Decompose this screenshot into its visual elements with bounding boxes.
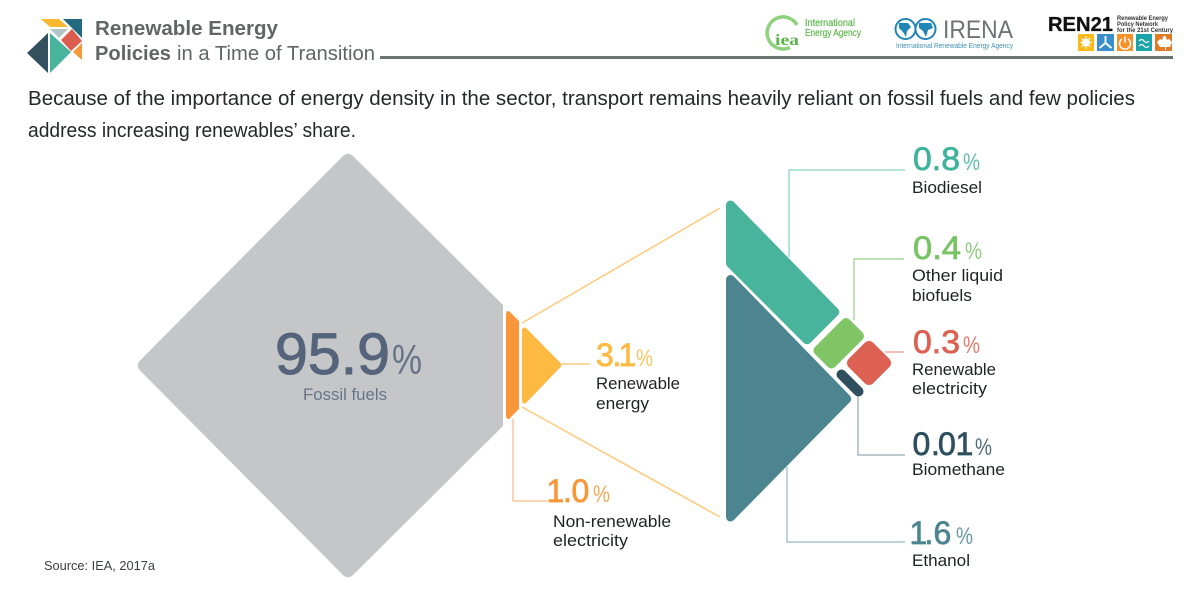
logo: IEA: International bbox=[805, 18, 855, 29]
label: 1.0% non-renewable electricity bbox=[546, 473, 671, 550]
header title bbox=[95, 18, 375, 65]
label: 1.0% non-renewable electricity: % bbox=[593, 481, 610, 508]
biodiesel shape bbox=[730, 205, 835, 340]
intro text: Because of the importance of energy density in the sector, transport remains heavily reliant on fossil fuels and few policies bbox=[28, 88, 1135, 110]
label: 0.3% renewable electricity: 0.3 bbox=[913, 324, 960, 360]
label: 0.01% biomethane bbox=[912, 426, 1005, 479]
source note: Source: IEA, 2017a bbox=[44, 559, 155, 573]
logo: IRENA bbox=[896, 16, 1013, 50]
logo: IRENA: IRENA bbox=[943, 16, 1013, 44]
fossil fuels diamond: 95.9 bbox=[275, 322, 390, 387]
label: 0.4% other liquid biofuels: Other liquid bbox=[912, 267, 1003, 285]
header title: in a Time of Transition bbox=[177, 43, 375, 65]
label: 0.3% renewable electricity: Renewable bbox=[912, 361, 996, 379]
label: 0.3% renewable electricity bbox=[912, 324, 996, 398]
fossil fuels diamond: Fossil fuels bbox=[303, 386, 387, 404]
label: 3.1% renewable energy: energy bbox=[596, 395, 650, 413]
connector lines bbox=[513, 170, 905, 542]
label: 1.0% non-renewable electricity: Non-renewable bbox=[553, 513, 671, 531]
fossil fuels diamond bbox=[138, 154, 503, 577]
header title: Renewable Energy bbox=[95, 18, 279, 40]
intro text: address increasing renewables’ share. bbox=[28, 120, 356, 142]
renewable energy triangle bbox=[524, 330, 559, 401]
non-renewable electricity bar bbox=[506, 311, 519, 419]
label: 3.1% renewable energy: 3.1 bbox=[596, 337, 636, 373]
fossil fuels diamond: % bbox=[392, 336, 422, 383]
ethanol triangle bbox=[730, 280, 847, 517]
label: 0.01% biomethane: Biomethane bbox=[912, 461, 1005, 479]
label: 0.8% biodiesel: Biodiesel bbox=[912, 179, 982, 197]
label: 0.4% other liquid biofuels: % bbox=[965, 238, 982, 265]
label: 1.6% ethanol bbox=[910, 515, 973, 570]
header logo: tangram bbox=[27, 19, 82, 73]
logo: IEA bbox=[767, 17, 861, 49]
logo: REN21: REN21 bbox=[1048, 14, 1113, 36]
logo: IEA: Energy Agency bbox=[805, 28, 861, 39]
label: 0.4% other liquid biofuels bbox=[912, 230, 1003, 305]
logo: REN21: Policy Network bbox=[1117, 22, 1159, 28]
other liquid biofuels shape bbox=[818, 323, 859, 364]
logo: REN21: Renewable Energy bbox=[1117, 16, 1169, 22]
logo: IEA: iea bbox=[775, 32, 799, 49]
label: 0.8% biodiesel bbox=[912, 141, 982, 197]
label: 0.01% biomethane: % bbox=[975, 434, 992, 461]
label: 1.6% ethanol: % bbox=[956, 523, 973, 550]
biomethane shape bbox=[842, 374, 858, 392]
label: 3.1% renewable energy: % bbox=[636, 345, 653, 372]
label: 0.4% other liquid biofuels: 0.4 bbox=[913, 230, 961, 266]
label: 0.3% renewable electricity: % bbox=[963, 332, 980, 359]
label: 1.0% non-renewable electricity: 1.0 bbox=[546, 473, 589, 509]
logo: REN21 bbox=[1048, 14, 1174, 51]
label: 0.3% renewable electricity: electricity bbox=[912, 380, 988, 398]
header title: Policies bbox=[95, 43, 171, 65]
label: 0.01% biomethane: 0.01 bbox=[912, 426, 973, 462]
label: 0.8% biodiesel: % bbox=[963, 149, 980, 176]
label: 1.0% non-renewable electricity: electricity bbox=[553, 532, 629, 550]
label: 3.1% renewable energy bbox=[596, 337, 680, 413]
label: 1.6% ethanol: 1.6 bbox=[910, 515, 951, 551]
renewable electricity shape bbox=[853, 347, 885, 379]
label: 3.1% renewable energy: Renewable bbox=[596, 375, 680, 393]
logo: IRENA: International Renewable Energy Agency bbox=[896, 41, 1013, 50]
label: 0.8% biodiesel: 0.8 bbox=[913, 141, 960, 177]
label: 1.6% ethanol: Ethanol bbox=[912, 552, 970, 570]
logo: REN21: for the 21st Century bbox=[1117, 28, 1174, 34]
label: 0.4% other liquid biofuels: biofuels bbox=[912, 287, 972, 305]
intro text bbox=[28, 88, 1135, 142]
